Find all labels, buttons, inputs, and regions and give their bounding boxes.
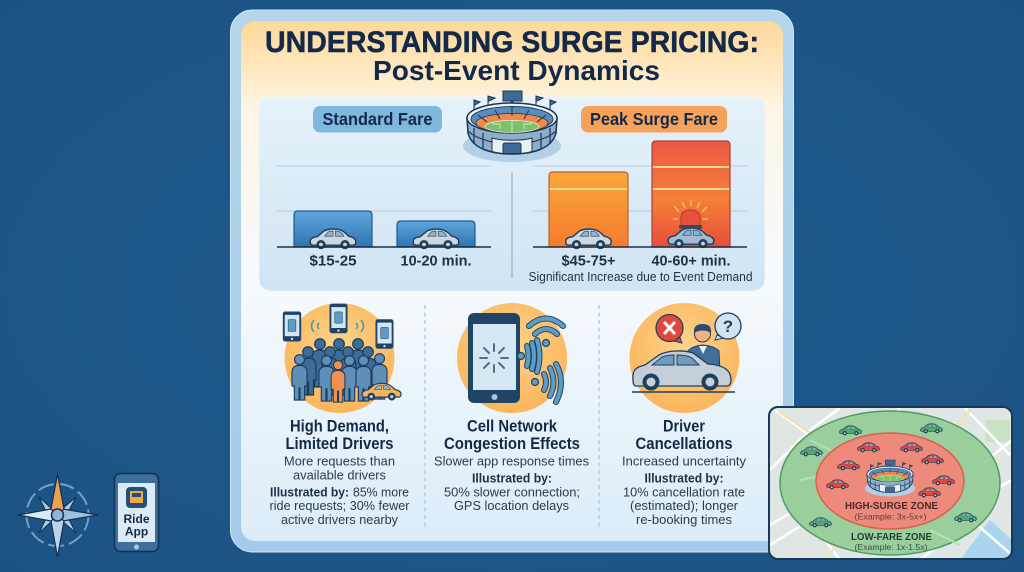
text block: GPS location delays [454, 498, 569, 513]
text block: Illustrated by: [472, 470, 552, 486]
cars: high surge zone [827, 443, 954, 497]
bar labels: 40-60+ min. [652, 254, 730, 270]
text block: 50% slower connection; [444, 484, 580, 500]
text block: Illustrated by: [644, 470, 724, 486]
bar labels: 10-20 min. [400, 254, 472, 270]
icon: ride app phone: Ride [123, 512, 150, 526]
panel: fare comparison chart [259, 97, 765, 291]
title: UNDERSTANDING SURGE PRICING: [265, 26, 759, 59]
bar: surge price [549, 172, 628, 249]
bar labels [310, 254, 730, 270]
heading: Congestion Effects [444, 435, 580, 453]
label: standard fare [313, 106, 442, 132]
heading [444, 418, 580, 453]
heading: Cancellations [636, 435, 732, 453]
icon: stadium [463, 91, 561, 162]
text block: Slower app response times [434, 454, 589, 468]
icon: driver and car [630, 303, 741, 413]
icon: crowd with phones [283, 303, 401, 413]
zone labels: LOW-FARE ZONE [851, 531, 932, 543]
heading [286, 418, 394, 453]
heading: High Demand, [290, 418, 389, 436]
title [265, 26, 759, 86]
text block: 10% cancellation rate [623, 484, 745, 500]
text block: More requests than [284, 454, 395, 468]
zone labels: (Example: 3x-5x+) [854, 512, 927, 522]
text block: ride requests; 30% fewer [270, 498, 410, 513]
text block: Illustrated by: [270, 484, 349, 500]
bar labels: $45-75+ [562, 254, 616, 270]
icon: compass [18, 474, 98, 557]
heading [636, 418, 732, 453]
panel: network congestion [434, 303, 589, 513]
heading: Driver [663, 418, 706, 436]
label: peak surge fare: Peak Surge Fare [590, 109, 718, 129]
heading: Limited Drivers [286, 435, 394, 453]
icon: small stadium [865, 460, 915, 497]
zone labels [845, 500, 938, 552]
main panel [230, 10, 794, 552]
zone labels: (Example: 1x-1.5x) [854, 542, 928, 552]
icon: driver and car: ? [723, 317, 733, 336]
title: Post-Event Dynamics [373, 55, 660, 86]
bar: surge wait with siren [652, 141, 730, 248]
panel: driver cancellations [622, 303, 746, 527]
text block: available drivers [293, 468, 386, 482]
icon: ride app phone [114, 474, 158, 552]
text block [270, 454, 410, 527]
bar: standard wait [397, 221, 475, 249]
text block [622, 454, 746, 527]
bar labels: $15-25 [310, 254, 356, 270]
text block: 85% more [353, 484, 409, 500]
bar: standard price [294, 211, 372, 249]
map: surge zones [769, 407, 1012, 560]
heading: Cell Network [467, 418, 558, 436]
cars: low fare zone [801, 424, 976, 527]
text block: active drivers nearby [281, 512, 398, 527]
text block: Increased uncertainty [622, 454, 746, 468]
zone labels: HIGH-SURGE ZONE [845, 500, 938, 512]
icon: phone and signals [457, 303, 567, 413]
chart caption: Significant Increase due to Event Demand [528, 270, 753, 284]
text block [434, 454, 589, 513]
panel: high demand [270, 303, 410, 527]
label: standard fare: Standard Fare [322, 109, 433, 129]
text block: (estimated); longer [630, 498, 739, 513]
text block: re-booking times [636, 512, 732, 527]
icon: ride app phone: App [125, 524, 148, 538]
dividers [425, 305, 599, 528]
